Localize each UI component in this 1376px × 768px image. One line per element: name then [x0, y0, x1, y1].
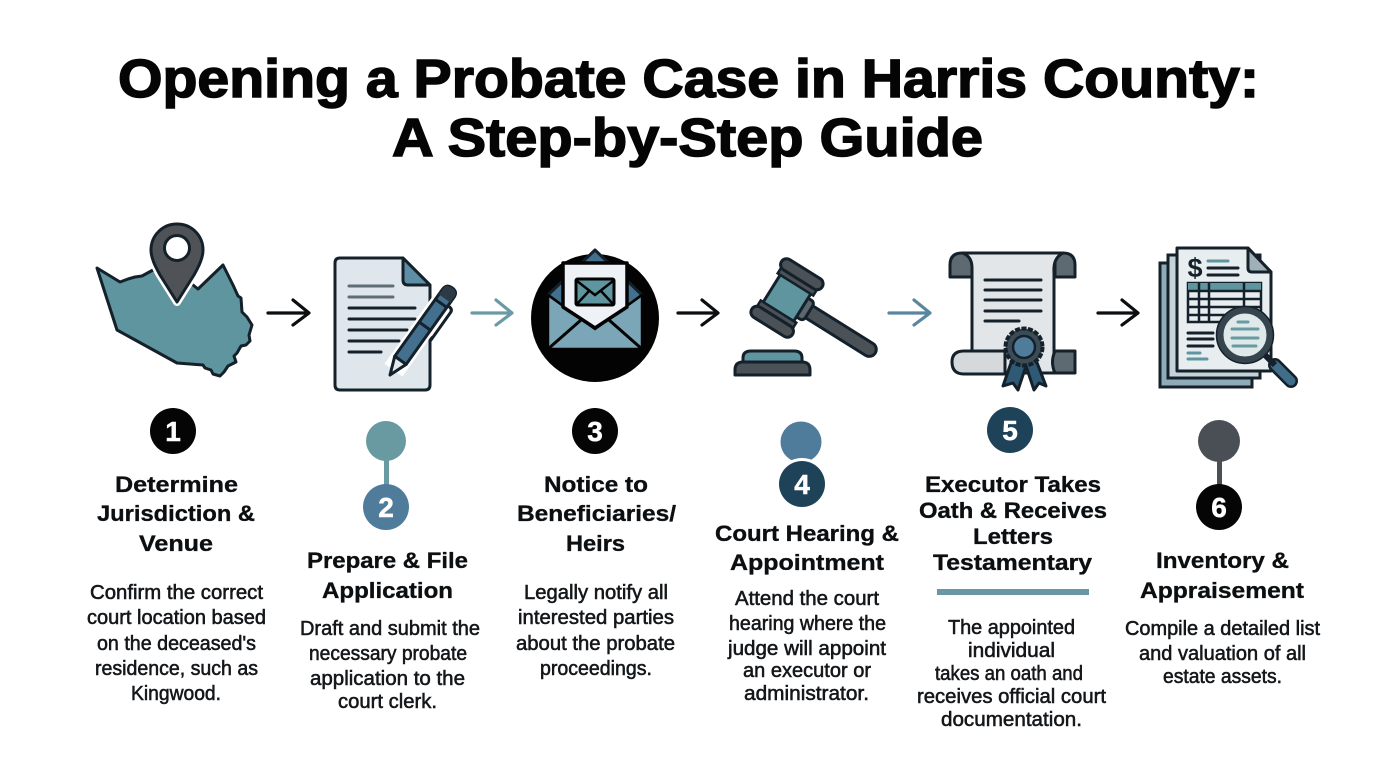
title: Opening a Probate Case in Harris County:: [118, 49, 1259, 109]
icon: document with pen: [335, 258, 463, 390]
heading: court hearing and appointment: Appointment: [730, 550, 885, 575]
number badge 1: 1: [165, 416, 181, 447]
panel: step 3 notice to beneficiaries: [516, 250, 677, 680]
text block: step 2 description: Draft and submit the: [300, 618, 480, 640]
text block: step 5 description: individual: [968, 640, 1055, 662]
text block: step 2 description: necessary probate: [309, 643, 467, 665]
arrow: step 1 to 2: [268, 300, 309, 325]
heading: prepare and file application: Application: [322, 578, 453, 603]
timeline dot: [780, 422, 822, 462]
connector: [1217, 458, 1222, 486]
arrow: step 5 to 6: [1098, 300, 1138, 325]
text block: step 2 description: court clerk.: [338, 691, 437, 713]
text block: step 6 description: and valuation of all: [1139, 643, 1306, 665]
connector: [384, 458, 389, 486]
text block: step 2 description: [300, 618, 480, 713]
text block: step 3 description: proceedings.: [540, 658, 652, 680]
arrow: step 3 to 4: [678, 300, 718, 325]
text block: step 4 description: administrator.: [744, 683, 869, 705]
text block: step 6 description: Compile a detailed list: [1125, 618, 1320, 640]
text block: step 1 description: on the deceased's: [97, 633, 256, 655]
text block: step 1 description: court location based: [87, 607, 266, 629]
heading: executor takes oath: [919, 472, 1107, 575]
heading: executor takes oath: Executor Takes: [925, 472, 1101, 497]
text block: step 4 description: an executor or: [743, 660, 871, 682]
number badge 4: 4: [794, 469, 810, 500]
text block: step 4 description: [727, 588, 886, 705]
number badge 2: [363, 484, 409, 530]
heading: determine jurisdiction and venue: Venue: [139, 531, 213, 556]
number badge 5: [987, 407, 1033, 453]
panel: step 5 executor oath: [917, 253, 1107, 731]
icon: scroll with ribbon seal: [950, 253, 1075, 390]
number badge 5: 5: [1002, 415, 1018, 446]
text block: step 6 description: estate assets.: [1163, 666, 1282, 688]
arrow: step 4 to 5: [889, 300, 930, 325]
text block: step 6 description: [1125, 618, 1320, 688]
heading: determine jurisdiction and venue: [97, 472, 255, 556]
icon: financial papers with magnifier: $: [1187, 253, 1203, 283]
icon: financial papers with magnifier: [1160, 248, 1291, 387]
number badge 6: 6: [1211, 492, 1227, 523]
text block: step 1 description: Confirm the correct: [90, 582, 263, 604]
text block: step 4 description: Attend the court: [735, 588, 879, 610]
panel: step 4 court hearing: [715, 256, 899, 705]
text block: step 5 description: receives official court: [917, 686, 1106, 708]
text block: step 5 description: The appointed: [948, 617, 1075, 639]
heading: determine jurisdiction and venue: Determine: [115, 472, 238, 497]
timeline dot: [1198, 420, 1240, 462]
heading: court hearing and appointment: Court Hearing &: [715, 521, 899, 546]
heading: notice to beneficiaries and heirs: Notice to: [544, 472, 648, 497]
title: [118, 49, 1259, 168]
icon: gavel and sound block: [735, 256, 893, 382]
number badge 2: 2: [378, 492, 394, 523]
heading: inventory and appraisement: [1140, 548, 1305, 603]
number badge 1: [150, 408, 196, 454]
text block: step 1 description: residence, such as: [95, 658, 258, 680]
text block: step 3 description: interested parties: [518, 607, 674, 629]
title: A Step-by-Step Guide: [392, 108, 983, 168]
number badge 6: [1196, 484, 1242, 530]
number badge 4: [776, 458, 828, 510]
text block: step 1 description: Kingwood.: [131, 683, 221, 705]
heading: executor takes oath: Oath & Receives: [919, 498, 1107, 523]
text block: step 1 description: [87, 582, 266, 705]
text block: step 4 description: judge will appoint: [727, 638, 886, 660]
text block: step 3 description: [516, 582, 675, 680]
number badge 3: 3: [587, 416, 603, 447]
heading: court hearing and appointment: [715, 521, 899, 575]
panel: step 2 prepare and file: [300, 258, 480, 713]
text block: step 2 description: application to the: [310, 668, 465, 690]
heading: prepare and file application: Prepare & File: [307, 548, 468, 573]
heading: inventory and appraisement: Inventory &: [1156, 548, 1289, 573]
text block: step 5 description: [917, 617, 1106, 731]
text block: step 3 description: Legally notify all: [524, 582, 668, 604]
heading: executor takes oath: Letters: [973, 524, 1053, 549]
heading: executor takes oath: Testamentary: [933, 550, 1093, 575]
number badge 3: [572, 408, 618, 454]
arrow: step 2 to 3: [472, 300, 512, 325]
text block: step 4 description: hearing where the: [729, 613, 886, 635]
timeline dot: [366, 421, 406, 461]
heading: notice to beneficiaries and heirs: Beneficiaries/: [517, 501, 677, 526]
icon: county map with location pin: [97, 224, 252, 376]
heading: prepare and file application: [307, 548, 468, 603]
panel: step 1 determine jurisdiction: [87, 224, 266, 705]
panel: step 6 inventory: [1125, 248, 1320, 688]
divider bar: [937, 589, 1089, 595]
heading: notice to beneficiaries and heirs: [517, 472, 677, 556]
text block: step 3 description: about the probate: [516, 633, 675, 655]
heading: inventory and appraisement: Appraisement: [1140, 578, 1305, 603]
icon: open envelope in black circle: [531, 250, 659, 382]
heading: notice to beneficiaries and heirs: Heirs: [566, 531, 625, 556]
heading: determine jurisdiction and venue: Jurisdiction &: [97, 501, 255, 526]
text block: step 5 description: takes an oath and: [935, 663, 1083, 685]
text block: step 5 description: documentation.: [941, 709, 1082, 731]
